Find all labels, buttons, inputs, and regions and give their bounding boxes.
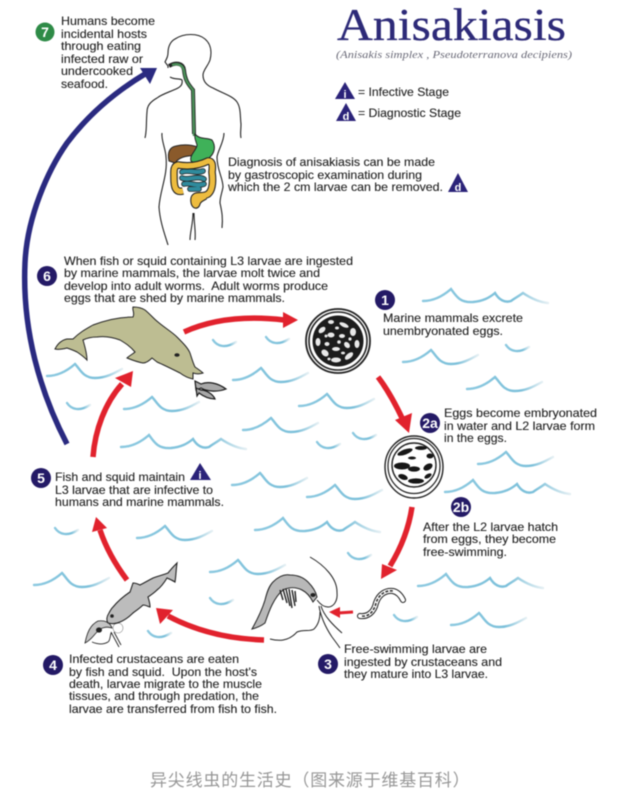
step 4: text: tissues, and through predation, the xyxy=(69,689,259,703)
step 7: text: Humans become xyxy=(61,14,155,28)
icon: diagnostic stage triangle: d xyxy=(343,111,349,123)
step 2b: badge xyxy=(451,497,471,517)
illustration: unembryonated egg xyxy=(306,309,370,373)
step 2b: text: free-swimming. xyxy=(423,545,507,559)
diagnosis text xyxy=(227,155,443,194)
digestive: esophagus xyxy=(169,64,194,134)
arrow: step 2b to larva xyxy=(381,507,412,579)
icon: infective triangle xyxy=(190,463,211,482)
icon: diagnostic triangle xyxy=(448,173,468,194)
title: Anisakiasis xyxy=(337,0,566,50)
arrow: larva to crustacean xyxy=(329,607,353,618)
digestive: small intestine xyxy=(182,171,204,189)
step 6: badge xyxy=(37,266,57,286)
step 4: badge xyxy=(43,655,63,675)
step 5: text: Fish and squid maintain xyxy=(55,470,185,484)
step 2a: text: in the eggs. xyxy=(444,431,507,445)
step 5: text: humans and marine mammals. xyxy=(55,495,224,509)
step 6: text: develop into adult worms. Adult worms produce xyxy=(64,279,328,293)
digestive: large intestine xyxy=(174,161,213,205)
step 3: badge xyxy=(318,654,338,674)
step 6: badge: 6 xyxy=(43,268,51,284)
illustration: free-swimming larva xyxy=(360,591,403,616)
legend label: infective: = Infective Stage xyxy=(358,85,449,99)
illustration: embryonated egg xyxy=(385,436,443,498)
step 1: text: Marine mammals excrete xyxy=(383,311,523,325)
step 7: text: seafood. xyxy=(61,77,108,91)
step 2b: text: from eggs, they become xyxy=(423,532,556,546)
step 3: text: ingested by crustaceans and xyxy=(344,655,502,669)
legend xyxy=(335,82,461,123)
step 6: text: eggs that are shed by marine mammals. xyxy=(64,291,285,305)
step 1: text: unembryonated eggs. xyxy=(383,324,503,338)
step 2a: badge xyxy=(420,413,440,433)
prey fish in dolphin mouth xyxy=(195,381,226,399)
step 2a: text: in water and L2 larvae form xyxy=(444,419,595,433)
step 3: badge: 3 xyxy=(324,656,332,672)
step 4: text xyxy=(69,652,277,716)
arrow: step 5 to step 6 xyxy=(93,371,133,457)
icon: infective stage triangle: i xyxy=(343,89,347,101)
arrow: step 6 to step 1 xyxy=(184,312,298,332)
step 7: text xyxy=(61,14,155,91)
icon: infective triangle: i xyxy=(198,470,202,482)
small crustacean xyxy=(85,621,123,647)
step 2b: text: After the L2 larvae hatch xyxy=(423,520,558,534)
step 5: badge: 5 xyxy=(37,470,45,486)
step 5: text xyxy=(55,470,224,509)
step 4: text: by fish and squid. Upon the host's xyxy=(69,665,257,679)
step 2b: text xyxy=(423,520,558,559)
step 7: text: incidental hosts xyxy=(61,27,147,41)
illustration: crustacean xyxy=(252,557,342,648)
arrow: humans infection path xyxy=(25,68,157,444)
step 7: text: undercooked xyxy=(61,64,133,78)
step 2a: text xyxy=(444,406,597,445)
arrow: step 1 to step 2a xyxy=(378,377,412,433)
step 5: text: L3 larvae that are infective to xyxy=(55,483,213,497)
diagnosis text: Diagnosis of anisakiasis can be made xyxy=(228,155,435,169)
step 2b: badge: 2b xyxy=(453,499,469,515)
arrow: step 4 to step 5 xyxy=(92,517,127,580)
step 5: badge xyxy=(31,468,51,488)
step 6: text xyxy=(64,254,353,305)
digestive: stomach xyxy=(191,134,214,164)
diagnosis text: by gastroscopic examination during xyxy=(228,168,422,182)
step 2a: text: Eggs become embryonated xyxy=(444,406,597,420)
illustration: fish eating crustacean xyxy=(85,563,177,647)
step 6: text: When fish or squid containing L3 larvae are ingested xyxy=(64,254,353,268)
illustration: dolphin xyxy=(55,307,226,399)
step 6: text: by marine mammals, the larvae molt twice and xyxy=(64,266,320,280)
step 4: text: larvae are transferred from fish to fish. xyxy=(69,702,277,716)
step 7: text: infected raw or xyxy=(61,52,143,66)
step 2a: badge: 2a xyxy=(422,415,438,431)
step 7: badge: 7 xyxy=(41,24,49,40)
step 3: text: they mature into L3 larvae. xyxy=(344,667,488,681)
step 3: text xyxy=(344,642,502,681)
step 7: badge xyxy=(36,22,54,42)
caption: 异尖线虫的生活史（图来源于维基百科） xyxy=(150,771,470,790)
step 1: text xyxy=(383,311,523,338)
legend label: diagnostic: = Diagnostic Stage xyxy=(358,106,461,120)
step 7: text: through eating xyxy=(61,39,141,53)
digestive: liver xyxy=(168,145,200,163)
icon: diagnostic triangle: d xyxy=(455,182,461,194)
arrow: step 3 to step 4 xyxy=(156,608,264,640)
water waves xyxy=(34,289,570,637)
step 4: text: Infected crustaceans are eaten xyxy=(69,652,239,666)
step 4: text: death, larvae migrate to the muscle xyxy=(69,677,262,691)
step 1: badge: 1 xyxy=(381,292,389,308)
diagnosis text: which the 2 cm larvae can be removed. xyxy=(227,180,443,194)
step 4: badge: 4 xyxy=(49,657,57,673)
icon: human body with digestive tract xyxy=(145,34,241,245)
subtitle: species names: (Anisakis simplex , Pseudoterranova decipiens) xyxy=(336,50,573,61)
step 3: text: Free-swimming larvae are xyxy=(344,642,487,656)
step 1: badge xyxy=(375,290,395,310)
